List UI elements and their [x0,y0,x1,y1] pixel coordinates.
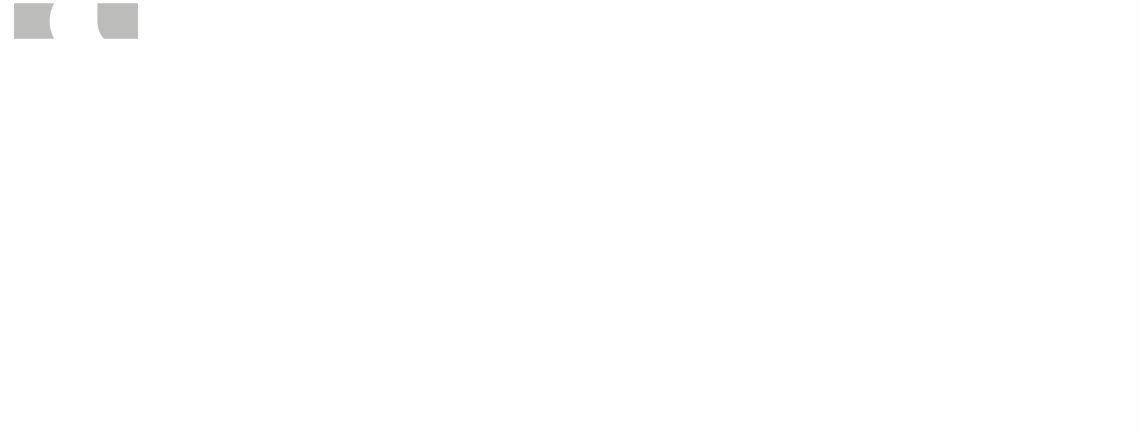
shape: left grey block with concave right edge [14,3,54,39]
shape: right grey block with rounded bottom-left corner [97,3,138,39]
